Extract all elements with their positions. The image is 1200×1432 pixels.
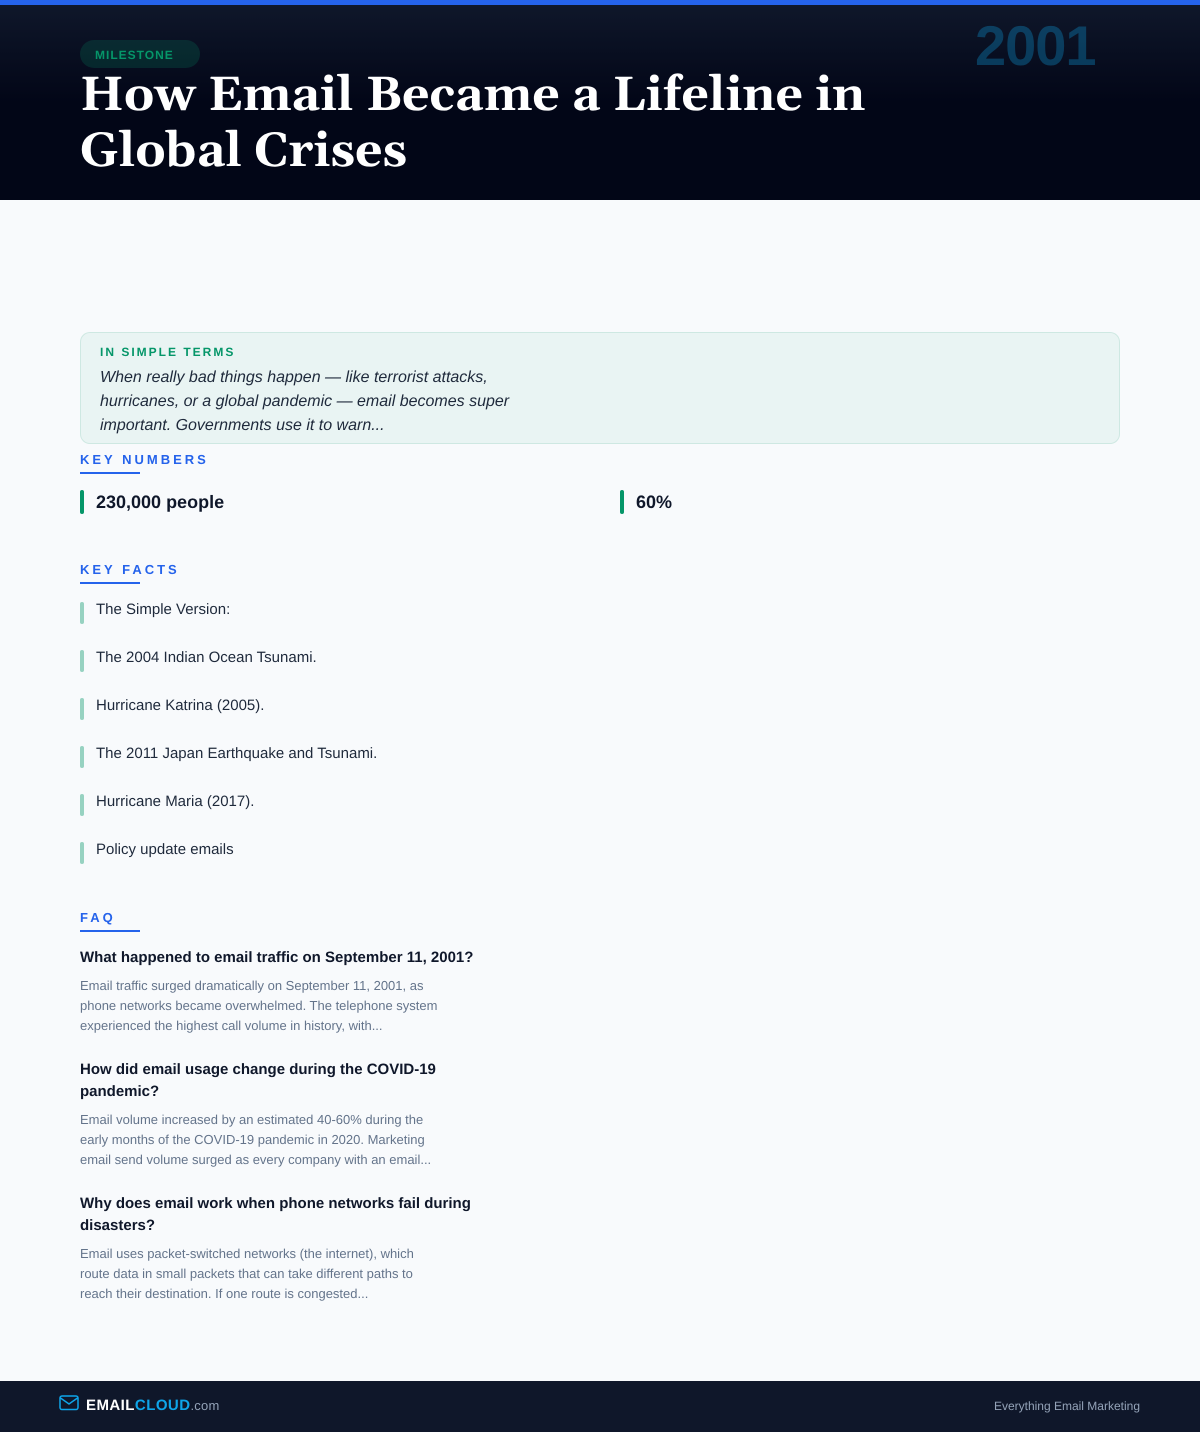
fact 1: The Simple Version: bbox=[96, 601, 230, 618]
faq answer 1 bbox=[80, 978, 437, 1033]
faq answer 3: reach their destination. If one route is congested... bbox=[80, 1286, 368, 1301]
fact 4 bbox=[80, 745, 377, 768]
fact 1 bbox=[80, 601, 230, 624]
faq question 2 bbox=[80, 1061, 436, 1100]
fact 6 bbox=[80, 841, 234, 864]
faq question 1: What happened to email traffic on September 11, 2001? bbox=[80, 949, 473, 966]
fact 2 bbox=[80, 649, 317, 672]
stat: 230,000 people: 230,000 people bbox=[96, 492, 224, 512]
fact 3 bbox=[80, 697, 264, 720]
panel: in simple terms bbox=[80, 332, 1120, 444]
faq question 3: disasters? bbox=[80, 1217, 155, 1234]
faq answer 2: Email volume increased by an estimated 40-60% during the bbox=[80, 1112, 423, 1127]
stat: 60%: 60% bbox=[636, 492, 672, 512]
faq answer 2: email send volume surged as every company with an email... bbox=[80, 1152, 431, 1167]
fact 3: Hurricane Katrina (2005). bbox=[96, 697, 264, 714]
faq answer 1: phone networks became overwhelmed. The telephone system bbox=[80, 998, 437, 1013]
panel text bbox=[100, 369, 510, 434]
faq answer 2 bbox=[80, 1112, 431, 1167]
milestone badge: MILESTONE bbox=[95, 48, 174, 62]
faq answer 1: experienced the highest call volume in history, with... bbox=[80, 1018, 383, 1033]
fact 6: Policy update emails bbox=[96, 841, 234, 858]
year watermark: 2001 bbox=[975, 14, 1096, 77]
faq question 3 bbox=[80, 1195, 471, 1234]
fact 5: Hurricane Maria (2017). bbox=[96, 793, 254, 810]
header band bbox=[0, 0, 1200, 200]
heading: key numbers: KEY NUMBERS bbox=[80, 452, 209, 467]
panel text: important. Governments use it to warn... bbox=[100, 417, 385, 434]
faq answer 3 bbox=[80, 1246, 414, 1301]
stat: 60% bbox=[620, 490, 672, 514]
panel text: When really bad things happen — like terrorist attacks, bbox=[100, 369, 488, 386]
faq answer 3: route data in small packets that can take different paths to bbox=[80, 1266, 413, 1281]
heading: key facts: KEY FACTS bbox=[80, 562, 180, 577]
title bbox=[80, 66, 865, 183]
logo wordmark: EMAILCLOUD.com bbox=[86, 1397, 219, 1414]
panel label: IN SIMPLE TERMS bbox=[100, 345, 235, 359]
icon: envelope bbox=[59, 1395, 79, 1410]
fact 5 bbox=[80, 793, 254, 816]
tagline: Everything Email Marketing bbox=[994, 1399, 1140, 1413]
faq answer 1: Email traffic surged dramatically on September 11, 2001, as bbox=[80, 978, 423, 993]
fact 4: The 2011 Japan Earthquake and Tsunami. bbox=[96, 745, 377, 762]
milestone badge bbox=[80, 40, 200, 68]
footer bbox=[0, 1381, 1200, 1432]
fact 2: The 2004 Indian Ocean Tsunami. bbox=[96, 649, 317, 666]
faq question 3: Why does email work when phone networks fail during bbox=[80, 1195, 471, 1212]
heading: faq: FAQ bbox=[80, 910, 116, 925]
faq question 2: How did email usage change during the COVID-19 bbox=[80, 1061, 436, 1078]
panel text: hurricanes, or a global pandemic — email becomes super bbox=[100, 393, 509, 410]
faq answer 2: early months of the COVID-19 pandemic in 2020. Marketing bbox=[80, 1132, 425, 1147]
faq answer 3: Email uses packet-switched networks (the internet), which bbox=[80, 1246, 414, 1261]
title: How Email Became a Lifeline in bbox=[80, 66, 865, 127]
title: Global Crises bbox=[80, 122, 407, 183]
faq question 2: pandemic? bbox=[80, 1083, 159, 1100]
